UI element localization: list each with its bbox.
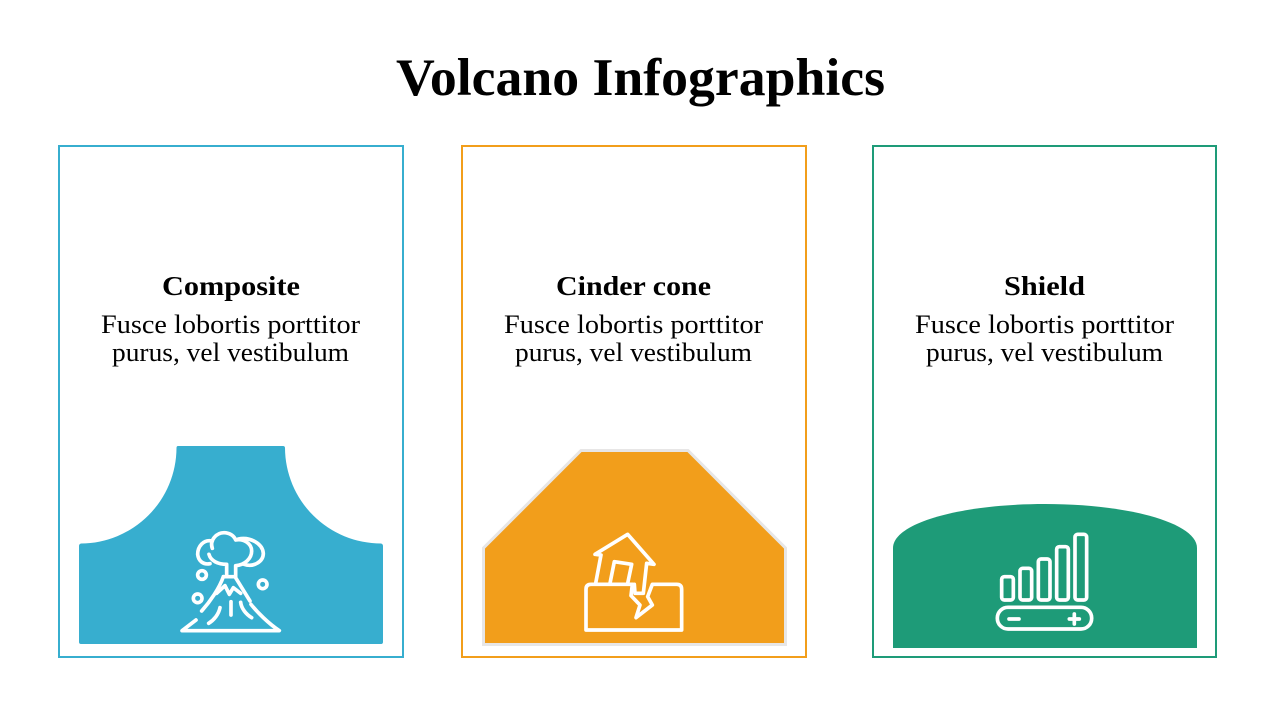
text block: composite: purus, vel vestibulum — [112, 338, 349, 367]
panel: composite — [59, 146, 403, 657]
panel: shield — [873, 146, 1216, 657]
heading: shield: Shield — [1004, 271, 1085, 301]
text block: composite — [101, 310, 360, 367]
text block: cinder cone: Fusce lobortis porttitor — [504, 310, 763, 339]
text block: shield — [915, 310, 1174, 367]
heading: cinder cone: Cinder cone — [556, 271, 711, 301]
text block: composite: Fusce lobortis porttitor — [101, 310, 360, 339]
icon: erupting volcano — [182, 533, 279, 631]
text block: cinder cone — [504, 310, 763, 367]
panel border: shield — [873, 146, 1216, 657]
shape: green plaque — [893, 504, 1197, 648]
panel border: cinder cone — [462, 146, 806, 657]
title: Volcano Infographics — [396, 49, 885, 107]
heading: composite: Composite — [162, 271, 300, 301]
text block: shield: Fusce lobortis porttitor — [915, 310, 1174, 339]
icon: magnitude scale — [997, 534, 1092, 629]
icon: cracked house — [586, 534, 682, 630]
text block: shield: purus, vel vestibulum — [926, 338, 1163, 367]
shape: blue plaque — [79, 446, 383, 644]
shape: orange plaque — [484, 450, 786, 644]
text block: cinder cone: purus, vel vestibulum — [515, 338, 752, 367]
panel border: composite — [59, 146, 403, 657]
panel: cinder cone — [462, 146, 806, 657]
